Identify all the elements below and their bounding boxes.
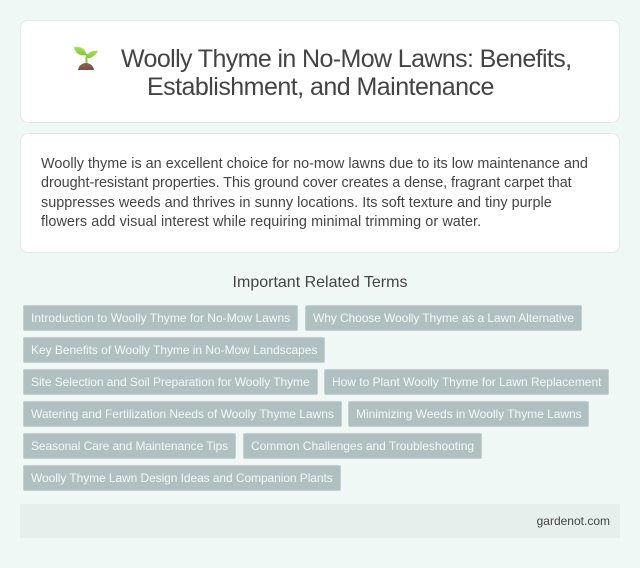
icon: seedling bbox=[74, 46, 98, 70]
text block: description bbox=[41, 156, 588, 230]
panel: title card bbox=[20, 20, 620, 123]
panel: description card bbox=[20, 133, 620, 253]
tag: Why Choose Woolly Thyme as a Lawn Alternative bbox=[313, 311, 574, 325]
text block: description: drought-resistant properties. This ground cover creates a dense, fragrant carpet that bbox=[41, 175, 572, 191]
panel: tag list bbox=[23, 305, 609, 491]
tag: How to Plant Woolly Thyme for Lawn Replacement bbox=[332, 375, 601, 389]
tag: Introduction to Woolly Thyme for No-Mow Lawns bbox=[31, 311, 290, 325]
tag bbox=[23, 369, 318, 395]
tag: Seasonal Care and Maintenance Tips bbox=[31, 439, 228, 453]
tag bbox=[23, 401, 342, 427]
footer bar bbox=[20, 504, 620, 538]
tag bbox=[23, 465, 341, 491]
title bbox=[121, 45, 571, 101]
tag bbox=[324, 369, 609, 395]
text block: description: Woolly thyme is an excellent choice for no-mow lawns due to its low maintenance and bbox=[41, 156, 588, 172]
tag bbox=[348, 401, 589, 427]
tag: Woolly Thyme Lawn Design Ideas and Companion Plants bbox=[31, 471, 333, 485]
text block: description: suppresses weeds and thrives in sunny locations. Its soft texture and tiny purple bbox=[41, 195, 552, 211]
tag: Common Challenges and Troubleshooting bbox=[251, 439, 474, 453]
tag: Minimizing Weeds in Woolly Thyme Lawns bbox=[356, 407, 582, 421]
tag: Key Benefits of Woolly Thyme in No-Mow Landscapes bbox=[31, 343, 317, 357]
tag: Watering and Fertilization Needs of Woolly Thyme Lawns bbox=[31, 407, 334, 421]
tag bbox=[243, 433, 482, 459]
title: Woolly Thyme in No-Mow Lawns: Benefits, bbox=[121, 45, 571, 73]
text block: description: flowers add visual interest while requiring minimal trimming or water. bbox=[41, 214, 481, 230]
tag bbox=[23, 433, 236, 459]
tag bbox=[305, 305, 582, 331]
heading: related terms: Important Related Terms bbox=[233, 274, 407, 291]
tag bbox=[23, 337, 325, 363]
tag bbox=[23, 305, 298, 331]
footer credit: gardenot.com bbox=[537, 514, 610, 528]
title: Establishment, and Maintenance bbox=[147, 73, 494, 101]
tag: Site Selection and Soil Preparation for Woolly Thyme bbox=[31, 375, 310, 389]
